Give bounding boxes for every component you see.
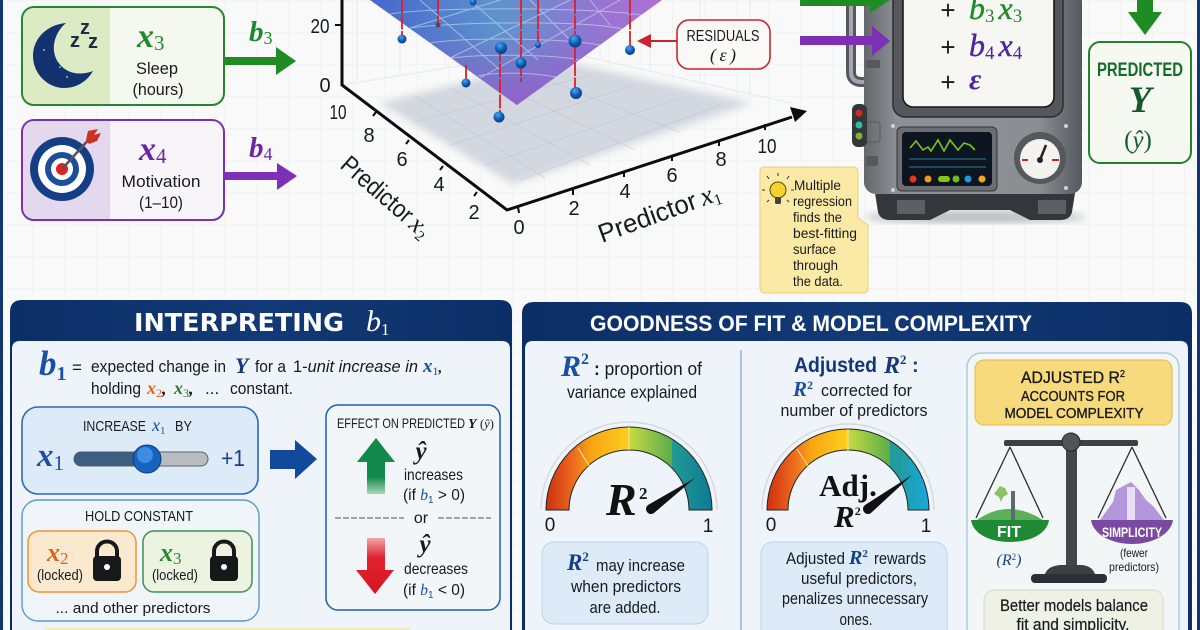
up arrow (357, 438, 395, 494)
effect box (326, 405, 500, 610)
icon: crescent moon with Zzz: z (88, 31, 98, 53)
arrow: b3: b (249, 16, 264, 48)
adjusted R2 gauge: 2 (855, 504, 861, 518)
note text: surface (793, 241, 836, 257)
3D regression chart (310, 0, 807, 251)
label: Sleep (hours): (hours) (132, 80, 184, 99)
R2 gauge: 2 (639, 484, 648, 503)
panel: goodness of fit (522, 302, 1192, 630)
R2 gauge: 1 (703, 516, 713, 537)
effect box: > 0) (434, 487, 465, 504)
simplicity pan: (fewer (1120, 546, 1148, 560)
adjusted R2 gauge: 0 (766, 515, 776, 536)
R2 note: are added. (590, 598, 660, 617)
complexity card (967, 353, 1179, 630)
axis tick labels: 8 (715, 149, 727, 171)
formula screen: + (940, 32, 956, 62)
arrow: b4 (225, 132, 297, 190)
predictor card: x3 sleep (22, 7, 224, 105)
fit pan: 2 (1012, 552, 1016, 562)
formula screen: 4 (1013, 43, 1023, 64)
yellow banner: MODEL COMPLEXITY (1004, 405, 1144, 422)
locked x3: (locked) (152, 567, 198, 584)
slider (74, 445, 208, 473)
effect box: Y (468, 417, 478, 432)
formula screen: 3 (1013, 6, 1022, 27)
panel shell (522, 302, 1192, 630)
yellow banner: ADJUSTED R (1021, 368, 1128, 387)
definition: for a (255, 357, 286, 376)
axis tick labels: 10 (758, 136, 776, 158)
increase x1 box: +1 (221, 445, 245, 471)
R2 heading: 2 (581, 351, 589, 368)
axis tick labels: 8 (363, 125, 375, 147)
callout: residuals: RESIDUALS (686, 28, 760, 45)
effect box: 1 (428, 495, 434, 506)
adjusted R2 heading: R (793, 377, 807, 401)
definition: , (438, 360, 442, 376)
icon: lightbulb (762, 173, 794, 204)
axis tick labels: 2 (568, 198, 580, 220)
label: Motivation (1-10): (1–10) (139, 193, 183, 212)
adjusted R2 note: useful predictors, (801, 570, 917, 588)
machine body (864, 0, 1082, 194)
axis tick labels (310, 16, 776, 239)
increase x1 box: BY (175, 418, 192, 435)
adjusted R2 heading: R (884, 353, 900, 379)
definition: , (188, 378, 194, 398)
hold constant box (22, 500, 259, 621)
conclusion box (984, 590, 1163, 630)
adjusted R2 note: penalizes unnecessary (782, 590, 929, 608)
note text: best-fitting (793, 225, 857, 241)
down arrow (356, 538, 394, 594)
yellow banner (975, 360, 1172, 425)
axis tick labels: 0 (319, 75, 331, 97)
formula screen: b (969, 27, 985, 63)
arrow: to effect (270, 440, 317, 479)
definition: x (174, 378, 183, 398)
locked x2: x (47, 538, 60, 567)
effect box: ŷ (412, 438, 427, 465)
arrow: b4: 4 (264, 144, 272, 164)
formula screen: 3 (985, 6, 994, 27)
machine (800, 0, 1085, 223)
chart floor (380, 60, 752, 184)
panel: interpreting b1 (10, 300, 512, 630)
heading symbol b1: b (366, 305, 381, 338)
effect box: or (414, 510, 429, 527)
axis tick labels: 10 (330, 102, 346, 124)
definition: constant. (230, 379, 293, 398)
effect box: (if b (403, 582, 428, 599)
adjusted R2 note: rewards (874, 550, 926, 568)
effect box: increases (404, 467, 463, 484)
effect box: < 0) (434, 582, 465, 599)
adjusted R2 gauge: Adj. (819, 468, 877, 503)
axis tick labels: 4 (619, 181, 631, 203)
R2 heading: R (561, 350, 581, 383)
simplicity pan: SIMPLICITY (1102, 524, 1163, 540)
axis tick labels: 6 (396, 149, 408, 171)
note text: through (793, 257, 838, 273)
R2 heading (560, 350, 703, 402)
adjusted R2 heading: Adjusted (794, 354, 877, 377)
arrow: output down (1128, 0, 1162, 35)
definition: b (39, 344, 56, 383)
conclusion box: Better models balance (1000, 596, 1148, 615)
R2 note: 2 (582, 549, 589, 564)
axis title: predictor x1: 1 (712, 191, 725, 209)
effect box: ŷ (416, 531, 431, 558)
label: x3: 3 (154, 31, 164, 55)
note: multiple regression (760, 167, 868, 293)
icon: crescent moon with Zzz (33, 17, 98, 88)
note text: regression (793, 193, 852, 209)
adjusted R2 gauge (762, 424, 934, 537)
axis tick labels: 6 (666, 165, 678, 187)
pipe (851, 0, 873, 82)
effect box: 1 (428, 590, 434, 601)
fit pan: ) (1015, 552, 1021, 569)
increase x1 box: 1 (160, 425, 166, 437)
label: x3: x (137, 18, 154, 55)
output box: predicted Y: (ŷ) (1124, 127, 1152, 154)
monitor (897, 127, 997, 191)
machine feet (865, 193, 1085, 223)
definition: Y (235, 353, 251, 378)
residual lines (402, 0, 630, 117)
adjusted R2 note: 2 (862, 548, 868, 560)
axis title: predictor x1: x (695, 179, 717, 212)
R2 note: may increase (596, 556, 685, 575)
pressure gauge (1014, 132, 1066, 184)
adjusted R2 gauge: 1 (921, 516, 931, 537)
R2 gauge (541, 422, 717, 537)
R2 gauge: R (605, 474, 637, 525)
formula screen (903, 0, 1054, 107)
adjusted R2 note: ones. (840, 611, 872, 629)
effect box: EFFECT ON PREDICTED (337, 415, 465, 431)
definition: , (161, 378, 166, 398)
locked x2: (locked) (37, 567, 83, 584)
yellow banner: 2 (1120, 369, 1125, 380)
R2 heading: : proportion of (594, 359, 703, 379)
locked x3 (143, 531, 252, 592)
input arrows into machine (800, 0, 890, 56)
definition: holding (91, 379, 141, 398)
R2 heading: variance explained (567, 382, 697, 402)
R2 note: when predictors (570, 577, 681, 596)
definition: expected change in (91, 357, 226, 376)
predictor card: x4 motivation (22, 120, 224, 220)
note text: the data. (793, 273, 843, 289)
output box: predicted Y: Y (1129, 80, 1155, 121)
definition (39, 344, 442, 400)
data points (398, 0, 635, 122)
output box: predicted Y (1089, 42, 1191, 163)
panel shell (10, 300, 512, 630)
increase x1 box: INCREASE (83, 418, 146, 435)
arrow: b3: 3 (264, 28, 272, 48)
increase x1 box (22, 407, 258, 494)
increase x1 box: x (152, 415, 160, 435)
locked x3: 3 (173, 549, 182, 568)
note text: Multiple (794, 177, 841, 193)
icon: target with dart (30, 129, 101, 201)
balance scale (971, 433, 1173, 583)
icon: crescent moon with Zzz: z (80, 17, 90, 39)
fit pan (971, 486, 1049, 569)
icon: crescent moon with Zzz: z (70, 30, 80, 52)
axis tick labels: 0 (513, 217, 525, 239)
locked x2 (28, 531, 136, 592)
adjusted R2 gauge: R (834, 499, 855, 534)
regression plane (370, 0, 662, 105)
axis title: predictor x2: Predictor (335, 150, 419, 229)
label: Sleep (hours): Sleep (136, 59, 178, 78)
increase x1 box: x (37, 438, 54, 474)
label: x4: 4 (156, 144, 167, 168)
chart back walls (342, 0, 790, 103)
adjusted R2 heading: 2 (900, 352, 907, 367)
indicator lights (852, 104, 867, 147)
formula screen: x (998, 27, 1013, 63)
increase x1 box: 1 (54, 451, 64, 475)
definition: 1-unit increase in (293, 357, 418, 376)
arrow: b3 (225, 16, 296, 75)
label: Motivation (1-10): Motivation (122, 172, 200, 191)
axis title: predictor x2: x (404, 209, 431, 239)
definition: x (423, 356, 432, 377)
R2 note: R (567, 550, 582, 575)
R2 note (542, 542, 708, 624)
adjusted R2 note: Adjusted (786, 550, 845, 568)
axis tick labels: 4 (433, 174, 445, 196)
simplicity pan (1091, 482, 1173, 574)
effect box: (ŷ) (480, 417, 494, 431)
locked x2: 2 (60, 549, 68, 568)
effect box: decreases (404, 561, 468, 578)
definition: 1 (432, 364, 438, 378)
label: x4: x (139, 131, 156, 168)
panel heading: GOODNESS OF FIT & MODEL COMPLEXITY (590, 311, 1032, 336)
definition: 3 (183, 386, 189, 400)
fit pan: FIT (997, 524, 1021, 541)
definition: = (72, 358, 82, 377)
adjusted R2 heading: corrected for (821, 381, 912, 400)
R2 gauge: 0 (545, 515, 555, 536)
callout: residuals: (ε) (710, 45, 736, 66)
axis title: predictor x1: Predictor (594, 185, 701, 249)
formula screen: + (940, 67, 956, 97)
adjusted R2 heading (780, 352, 928, 420)
display frame (893, 0, 1063, 117)
note text: finds the (793, 209, 842, 225)
adjusted R2 heading: 2 (807, 378, 813, 392)
definition: x (147, 378, 156, 398)
adjusted R2 heading: number of predictors (780, 401, 928, 420)
axis tick labels: 20 (310, 16, 330, 38)
yellow banner: ACCOUNTS FOR (1021, 388, 1125, 405)
adjusted R2 note (761, 542, 947, 630)
effect box: (if b (403, 487, 428, 504)
axis title: predictor x2: 2 (411, 228, 427, 245)
definition: 2 (156, 386, 162, 400)
hold constant box: HOLD CONSTANT (85, 508, 193, 525)
cropped note strip (45, 628, 410, 630)
locked x3: x (160, 538, 173, 567)
definition: ... (205, 379, 219, 398)
panel heading: INTERPRETING (134, 308, 344, 337)
adjusted R2 heading: : (912, 355, 919, 377)
simplicity pan: predictors) (1109, 560, 1159, 574)
definition: 1 (56, 363, 66, 385)
adjusted R2 note: R (849, 547, 862, 569)
callout: residuals (637, 20, 770, 69)
axes (335, 0, 807, 213)
heading symbol b1: 1 (381, 320, 390, 339)
formula screen: ε (969, 63, 982, 96)
fit pan: (R (997, 552, 1012, 569)
formula screen: 4 (985, 43, 995, 64)
hold constant box: ... and other predictors (56, 600, 210, 617)
axis tick labels: 2 (468, 202, 480, 224)
arrow: b4: b (249, 132, 264, 164)
